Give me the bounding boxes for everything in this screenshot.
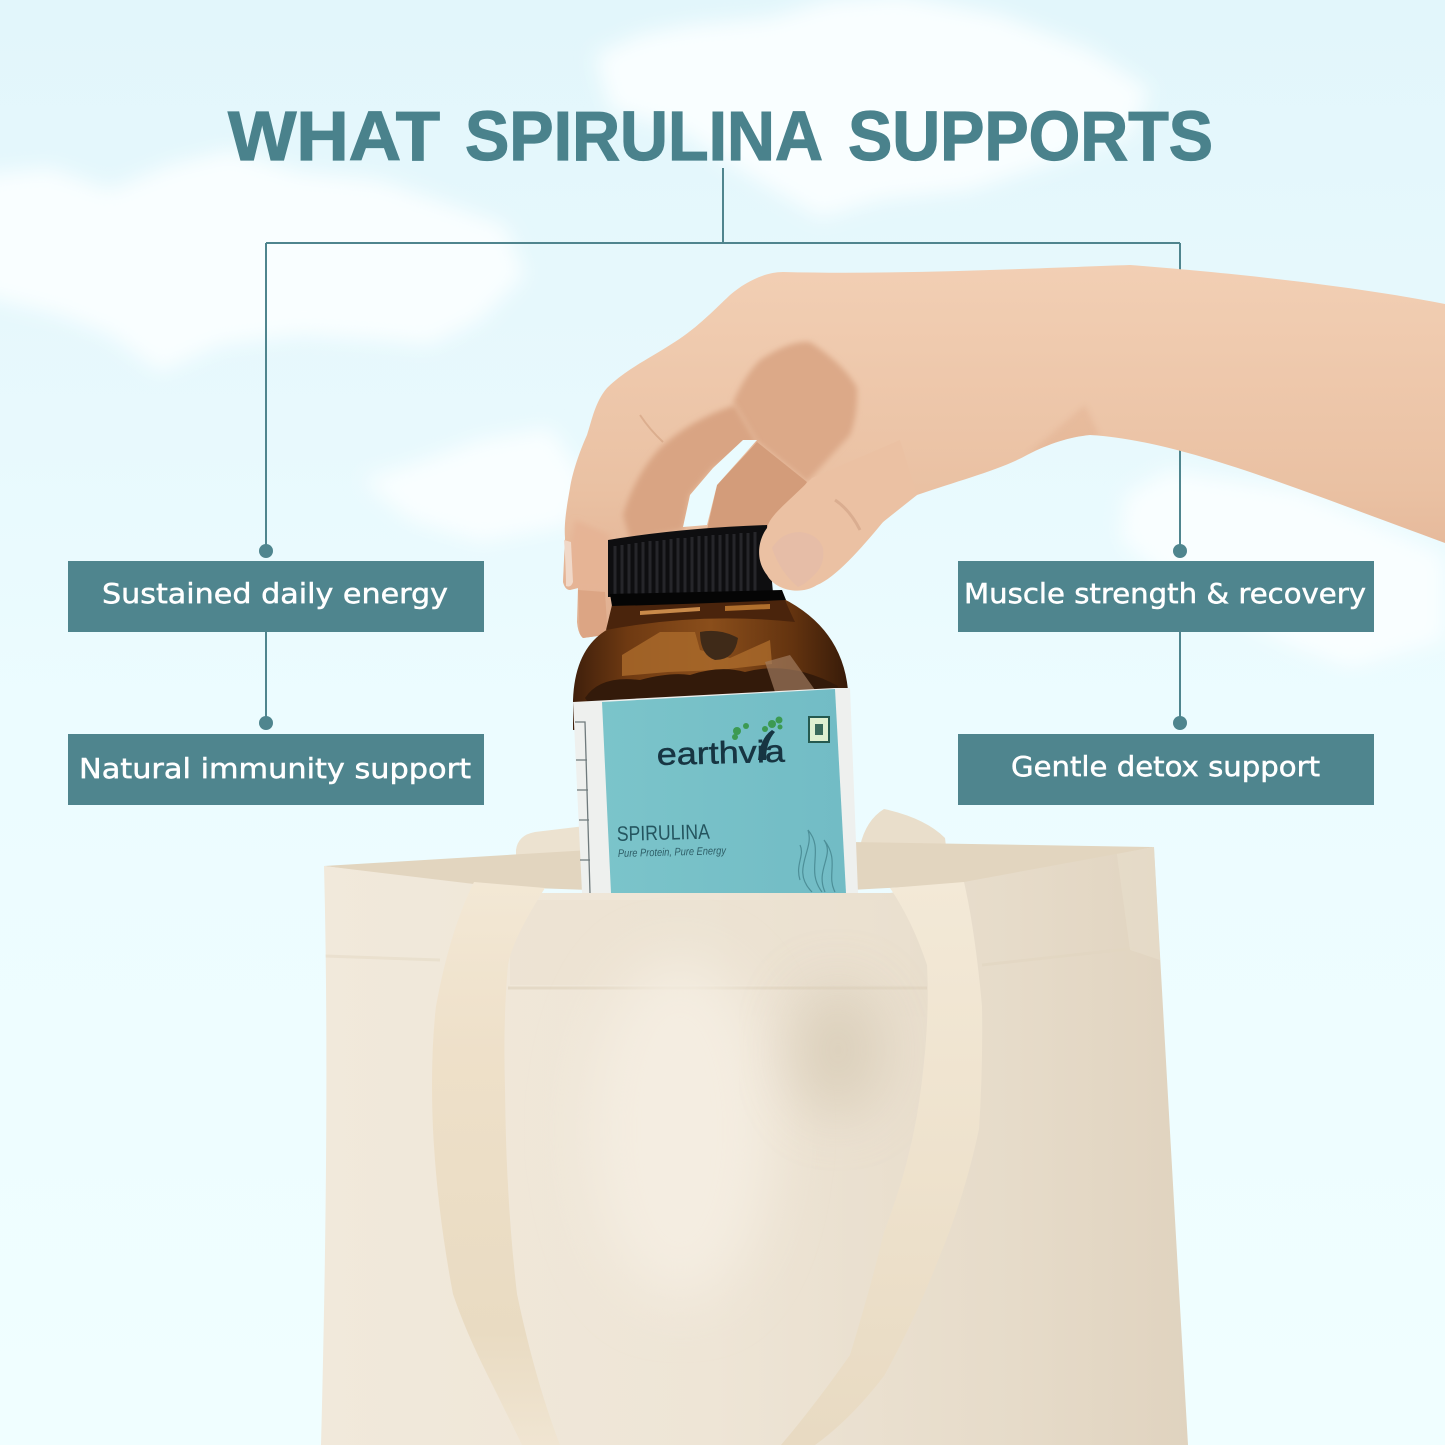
label: muscle strength and recovery [958, 561, 1374, 632]
bottle glass [573, 598, 848, 730]
title: WHAT [228, 97, 440, 175]
label: gentle detox support [958, 734, 1374, 805]
right side hem [982, 948, 1137, 965]
gusset stitch [1116, 847, 1160, 960]
product bottle [573, 525, 858, 893]
second finger [623, 405, 757, 540]
fingernail edge [564, 540, 573, 586]
logo text: earthvia [656, 734, 786, 772]
bag back rim [324, 809, 1154, 890]
wrist shadow [1037, 409, 1097, 450]
right handle [781, 882, 982, 1445]
title: SUPPORTS [848, 97, 1213, 175]
thumb knuckle crease [835, 500, 860, 530]
label teal [602, 689, 846, 893]
hand: fingers and arm silhouette [563, 265, 1445, 640]
central hem line [508, 986, 927, 990]
ring finger [707, 442, 807, 530]
clouds [0, 0, 1445, 668]
capsules inside [585, 668, 838, 705]
label: sustained daily energy: Sustained daily energy [102, 577, 448, 610]
hand: thumb over cap [759, 440, 917, 591]
thumbnail [772, 532, 823, 587]
upper panel shade [510, 900, 910, 985]
label: natural immunity support [68, 734, 484, 805]
label: gentle detox support: Gentle detox support [1011, 750, 1320, 783]
index finger shade near cap [563, 526, 590, 590]
glass highlight [622, 632, 772, 676]
title [228, 97, 1213, 175]
label: natural immunity support: Natural immunity support [79, 752, 471, 785]
seaweed icon [799, 830, 835, 892]
fssai-like mark [809, 717, 829, 742]
connector lines [266, 168, 1180, 723]
product name: SPIRULINA [617, 821, 710, 846]
tote bag [321, 847, 1188, 1445]
knuckle creases [640, 415, 663, 442]
left side hem [324, 956, 440, 960]
light pocket [616, 974, 762, 1274]
label: sustained daily energy [68, 561, 484, 632]
label: muscle strength and recovery: Muscle strength & recovery [964, 577, 1366, 610]
connector dots [259, 544, 1187, 730]
logo leaves [732, 716, 782, 760]
title: SPIRULINA [465, 97, 823, 175]
neck ring [606, 600, 795, 630]
pocket shadow [793, 985, 883, 1115]
palm shadow [733, 342, 857, 482]
label white [573, 688, 858, 893]
sky gap between fingers [683, 440, 757, 527]
bag front panel [321, 847, 1188, 1445]
bottle cap [608, 525, 786, 606]
side table [575, 722, 590, 893]
tagline: Pure Protein, Pure Energy [618, 845, 727, 860]
left handle [432, 882, 560, 1445]
